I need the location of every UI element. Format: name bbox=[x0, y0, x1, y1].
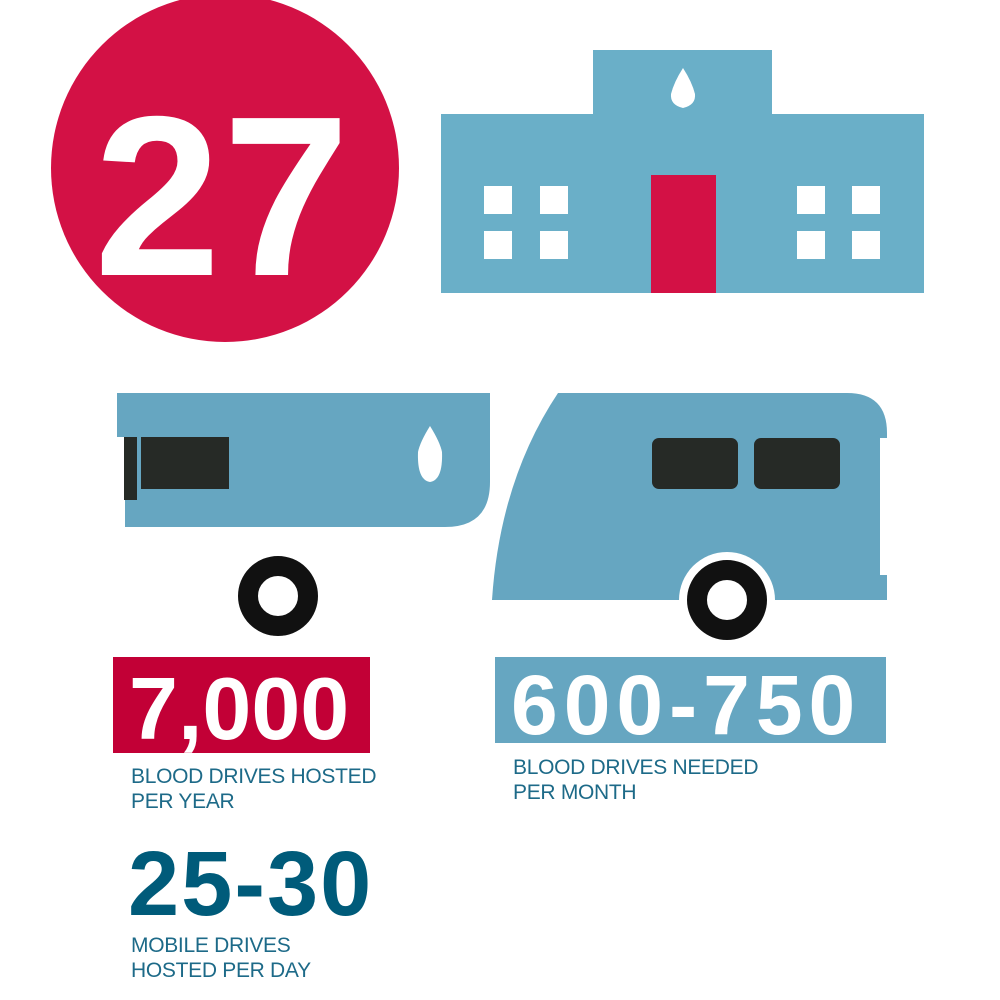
number 27: 27 bbox=[94, 70, 352, 324]
label: mobile drives hosted per day: HOSTED PER DAY bbox=[131, 959, 311, 982]
bus front cab bbox=[117, 393, 490, 527]
front wheel bbox=[248, 566, 308, 626]
label: mobile drives hosted per day bbox=[131, 934, 311, 982]
circle: 27 bbox=[51, 0, 399, 342]
icon: drop logo bbox=[418, 426, 442, 482]
label: blood drives hosted per year: PER YEAR bbox=[131, 790, 234, 813]
windows bbox=[484, 186, 880, 259]
stat: 7,000: 7,000 bbox=[129, 659, 349, 758]
stat: 25-30: 25-30 bbox=[128, 833, 373, 935]
trailer bbox=[492, 393, 887, 600]
label: blood drives hosted per year bbox=[131, 765, 376, 813]
label: blood drives hosted per year: BLOOD DRIVES HOSTED bbox=[131, 765, 376, 788]
label: mobile drives hosted per day: MOBILE DRIVES bbox=[131, 934, 290, 957]
label: blood drives needed per month: PER MONTH bbox=[513, 781, 636, 804]
label: blood drives needed per month: BLOOD DRIVES NEEDED bbox=[513, 756, 758, 779]
door bbox=[651, 175, 716, 293]
stat: 600-750: 600-750 bbox=[511, 658, 861, 752]
label: blood drives needed per month bbox=[513, 756, 758, 804]
rear wheel bbox=[697, 570, 757, 630]
icon: drop logo bbox=[671, 68, 695, 108]
